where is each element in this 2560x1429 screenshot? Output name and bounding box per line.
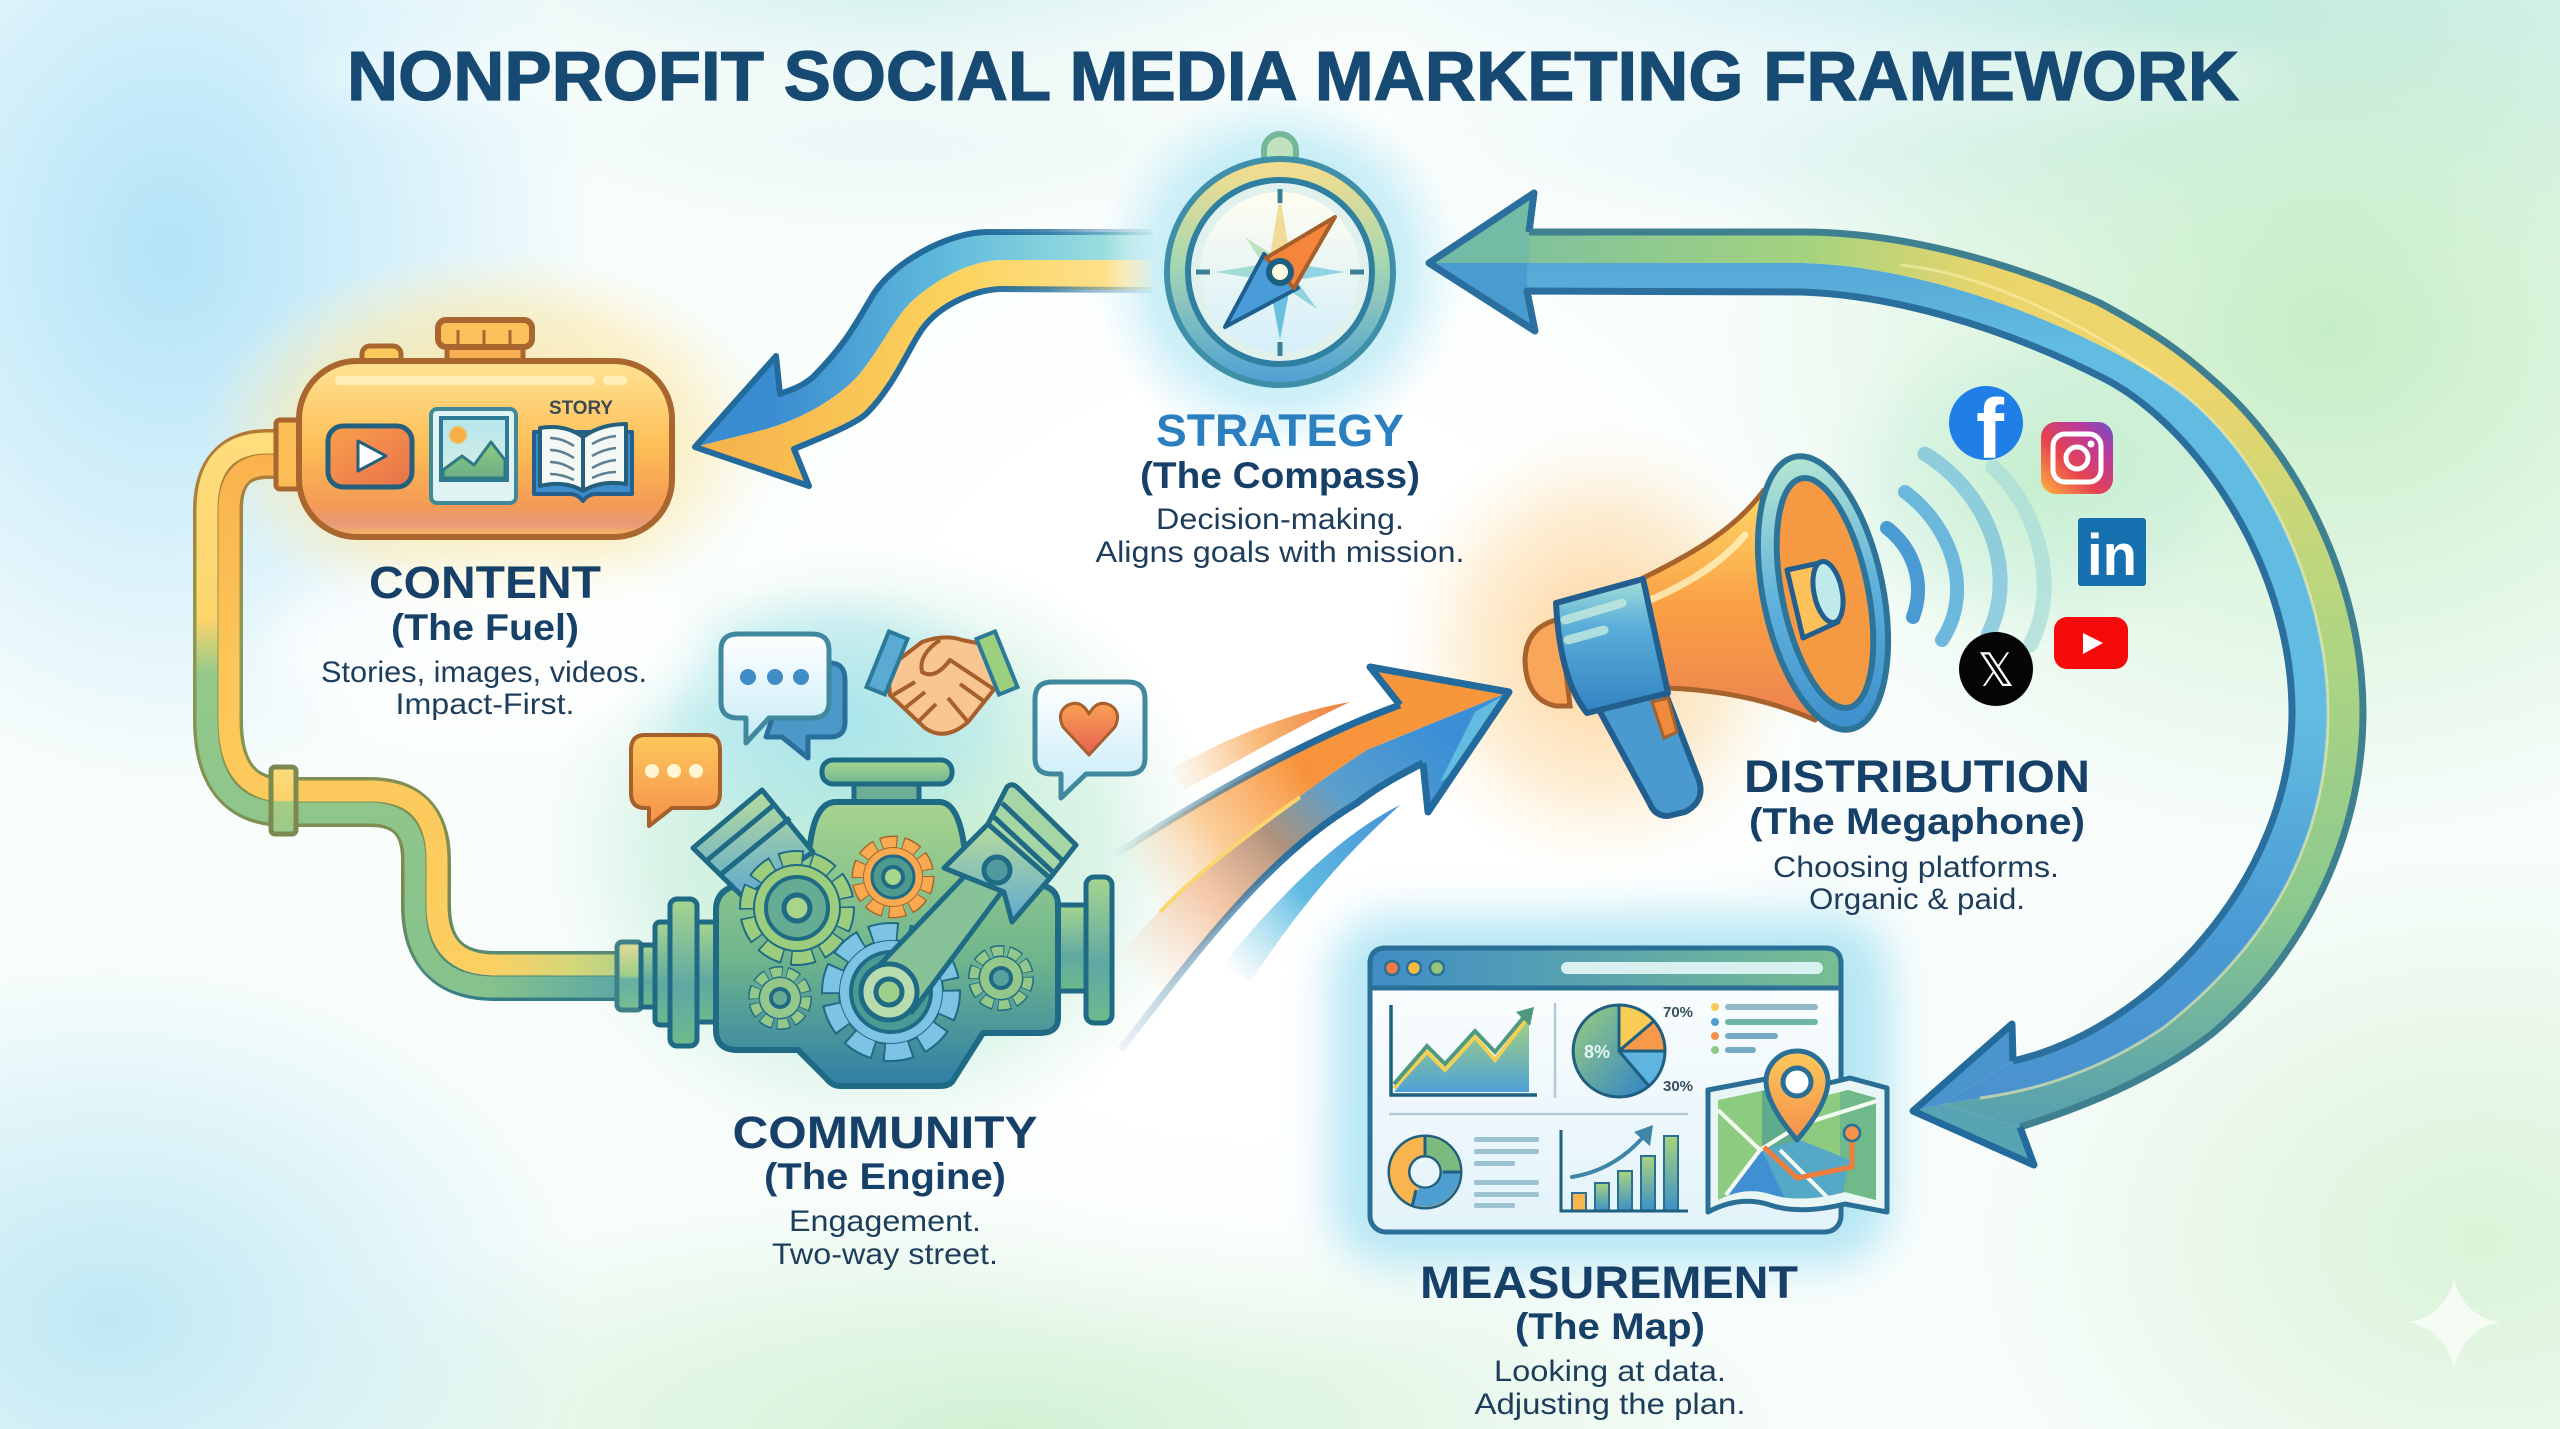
piston: left [693, 790, 813, 898]
text: impact-first: Impact-First. [396, 688, 574, 721]
text: organic and paid: Organic & paid. [1809, 883, 2025, 916]
heading: content: CONTENT [369, 557, 601, 608]
icon: map with pin [1708, 1051, 1887, 1212]
icon: sparkle watermark [2408, 1277, 2500, 1369]
arrow: strategy to content [695, 232, 1153, 486]
engine block [716, 802, 1058, 1086]
icon: compass [1167, 134, 1393, 385]
subheading: the megaphone: (The Megaphone) [1749, 801, 2085, 842]
speed streak: blue [1222, 805, 1400, 982]
icon: facebook [1949, 382, 2023, 476]
subheading: the compass: (The Compass) [1140, 455, 1420, 496]
engine side flanges [641, 760, 1112, 1046]
subheading: the fuel: (The Fuel) [391, 607, 579, 648]
icon: video play button [328, 426, 412, 487]
legend [1711, 1003, 1818, 1054]
panel: distribution megaphone [1525, 382, 2146, 916]
label: 8 percent: 8% [1584, 1042, 1610, 1062]
label: 30 percent: 30% [1663, 1078, 1693, 1095]
gear: big blue crank [831, 932, 951, 1052]
panel: strategy compass [1096, 134, 1464, 569]
text: engagement: Engagement. [789, 1205, 981, 1238]
chart: line area [1391, 1005, 1537, 1095]
heading: distribution: DISTRIBUTION [1744, 751, 2090, 802]
heading: strategy: STRATEGY [1156, 405, 1404, 456]
icon: story book [534, 398, 632, 501]
arrow: big loop from measurement back to strategy [1429, 193, 2363, 1165]
arrow body: blue lower half [1115, 692, 1509, 1050]
title: NONPROFIT SOCIAL MEDIA MARKETING FRAMEWORK [347, 37, 2239, 115]
arrow: community to distribution [1115, 667, 1509, 1050]
icon: dashboard window [1370, 948, 1841, 1232]
heading: community: COMMUNITY [732, 1107, 1038, 1158]
gear: big green [747, 858, 847, 958]
panel: content fuel tank [207, 320, 672, 1010]
gear: small green left [754, 972, 806, 1024]
chart: bars [1561, 1125, 1688, 1211]
text: aligns goals: Aligns goals with mission. [1096, 536, 1464, 569]
icon: x: 𝕏 [1977, 643, 2015, 697]
chart: pie [1573, 1005, 1665, 1097]
text: two-way street: Two-way street. [772, 1238, 998, 1271]
icon: chat bubble pair [721, 634, 845, 758]
subheading: the engine: (The Engine) [764, 1156, 1006, 1197]
text lines [1474, 1137, 1539, 1208]
arrow body: orange upper half [1115, 667, 1509, 960]
icon: linkedin: in [2087, 523, 2137, 588]
subheading: the map: (The Map) [1515, 1306, 1705, 1347]
icon: orange chat bubble [631, 735, 720, 826]
piston rod [870, 856, 1012, 1012]
icon: x [1959, 632, 2033, 706]
text: looking at data: Looking at data. [1494, 1355, 1726, 1388]
pipe: fuel line from tank to engine [207, 443, 642, 1010]
text: choosing platforms: Choosing platforms. [1773, 851, 2059, 884]
gear: small green right [974, 951, 1028, 1005]
icon: sound waves [1887, 454, 2044, 645]
icon: image card [431, 409, 516, 503]
label: story: STORY [549, 398, 613, 419]
text: adjusting the plan: Adjusting the plan. [1474, 1388, 1746, 1421]
heading: measurement: MEASUREMENT [1420, 1257, 1798, 1308]
label: 70 percent: 70% [1663, 1004, 1693, 1021]
icon: fuel tank [276, 320, 672, 537]
gear: orange [858, 842, 928, 912]
text: stories images videos: Stories, images, videos. [321, 656, 647, 689]
speed streak: orange [1170, 702, 1350, 790]
icon: heart bubble [1035, 682, 1145, 798]
icon: instagram [2041, 422, 2113, 494]
icon: facebook: f [1976, 382, 2005, 476]
panel: community engine [631, 631, 1145, 1271]
icon: engine [641, 760, 1112, 1086]
icon: youtube [2054, 617, 2128, 669]
panel: measurement dashboard [1370, 948, 1887, 1421]
piston: right [944, 785, 1076, 922]
text: decision-making: Decision-making. [1156, 503, 1404, 536]
icon: handshake [866, 631, 1018, 734]
chart: donut [1399, 1136, 1461, 1207]
icon: megaphone [1525, 445, 1910, 816]
